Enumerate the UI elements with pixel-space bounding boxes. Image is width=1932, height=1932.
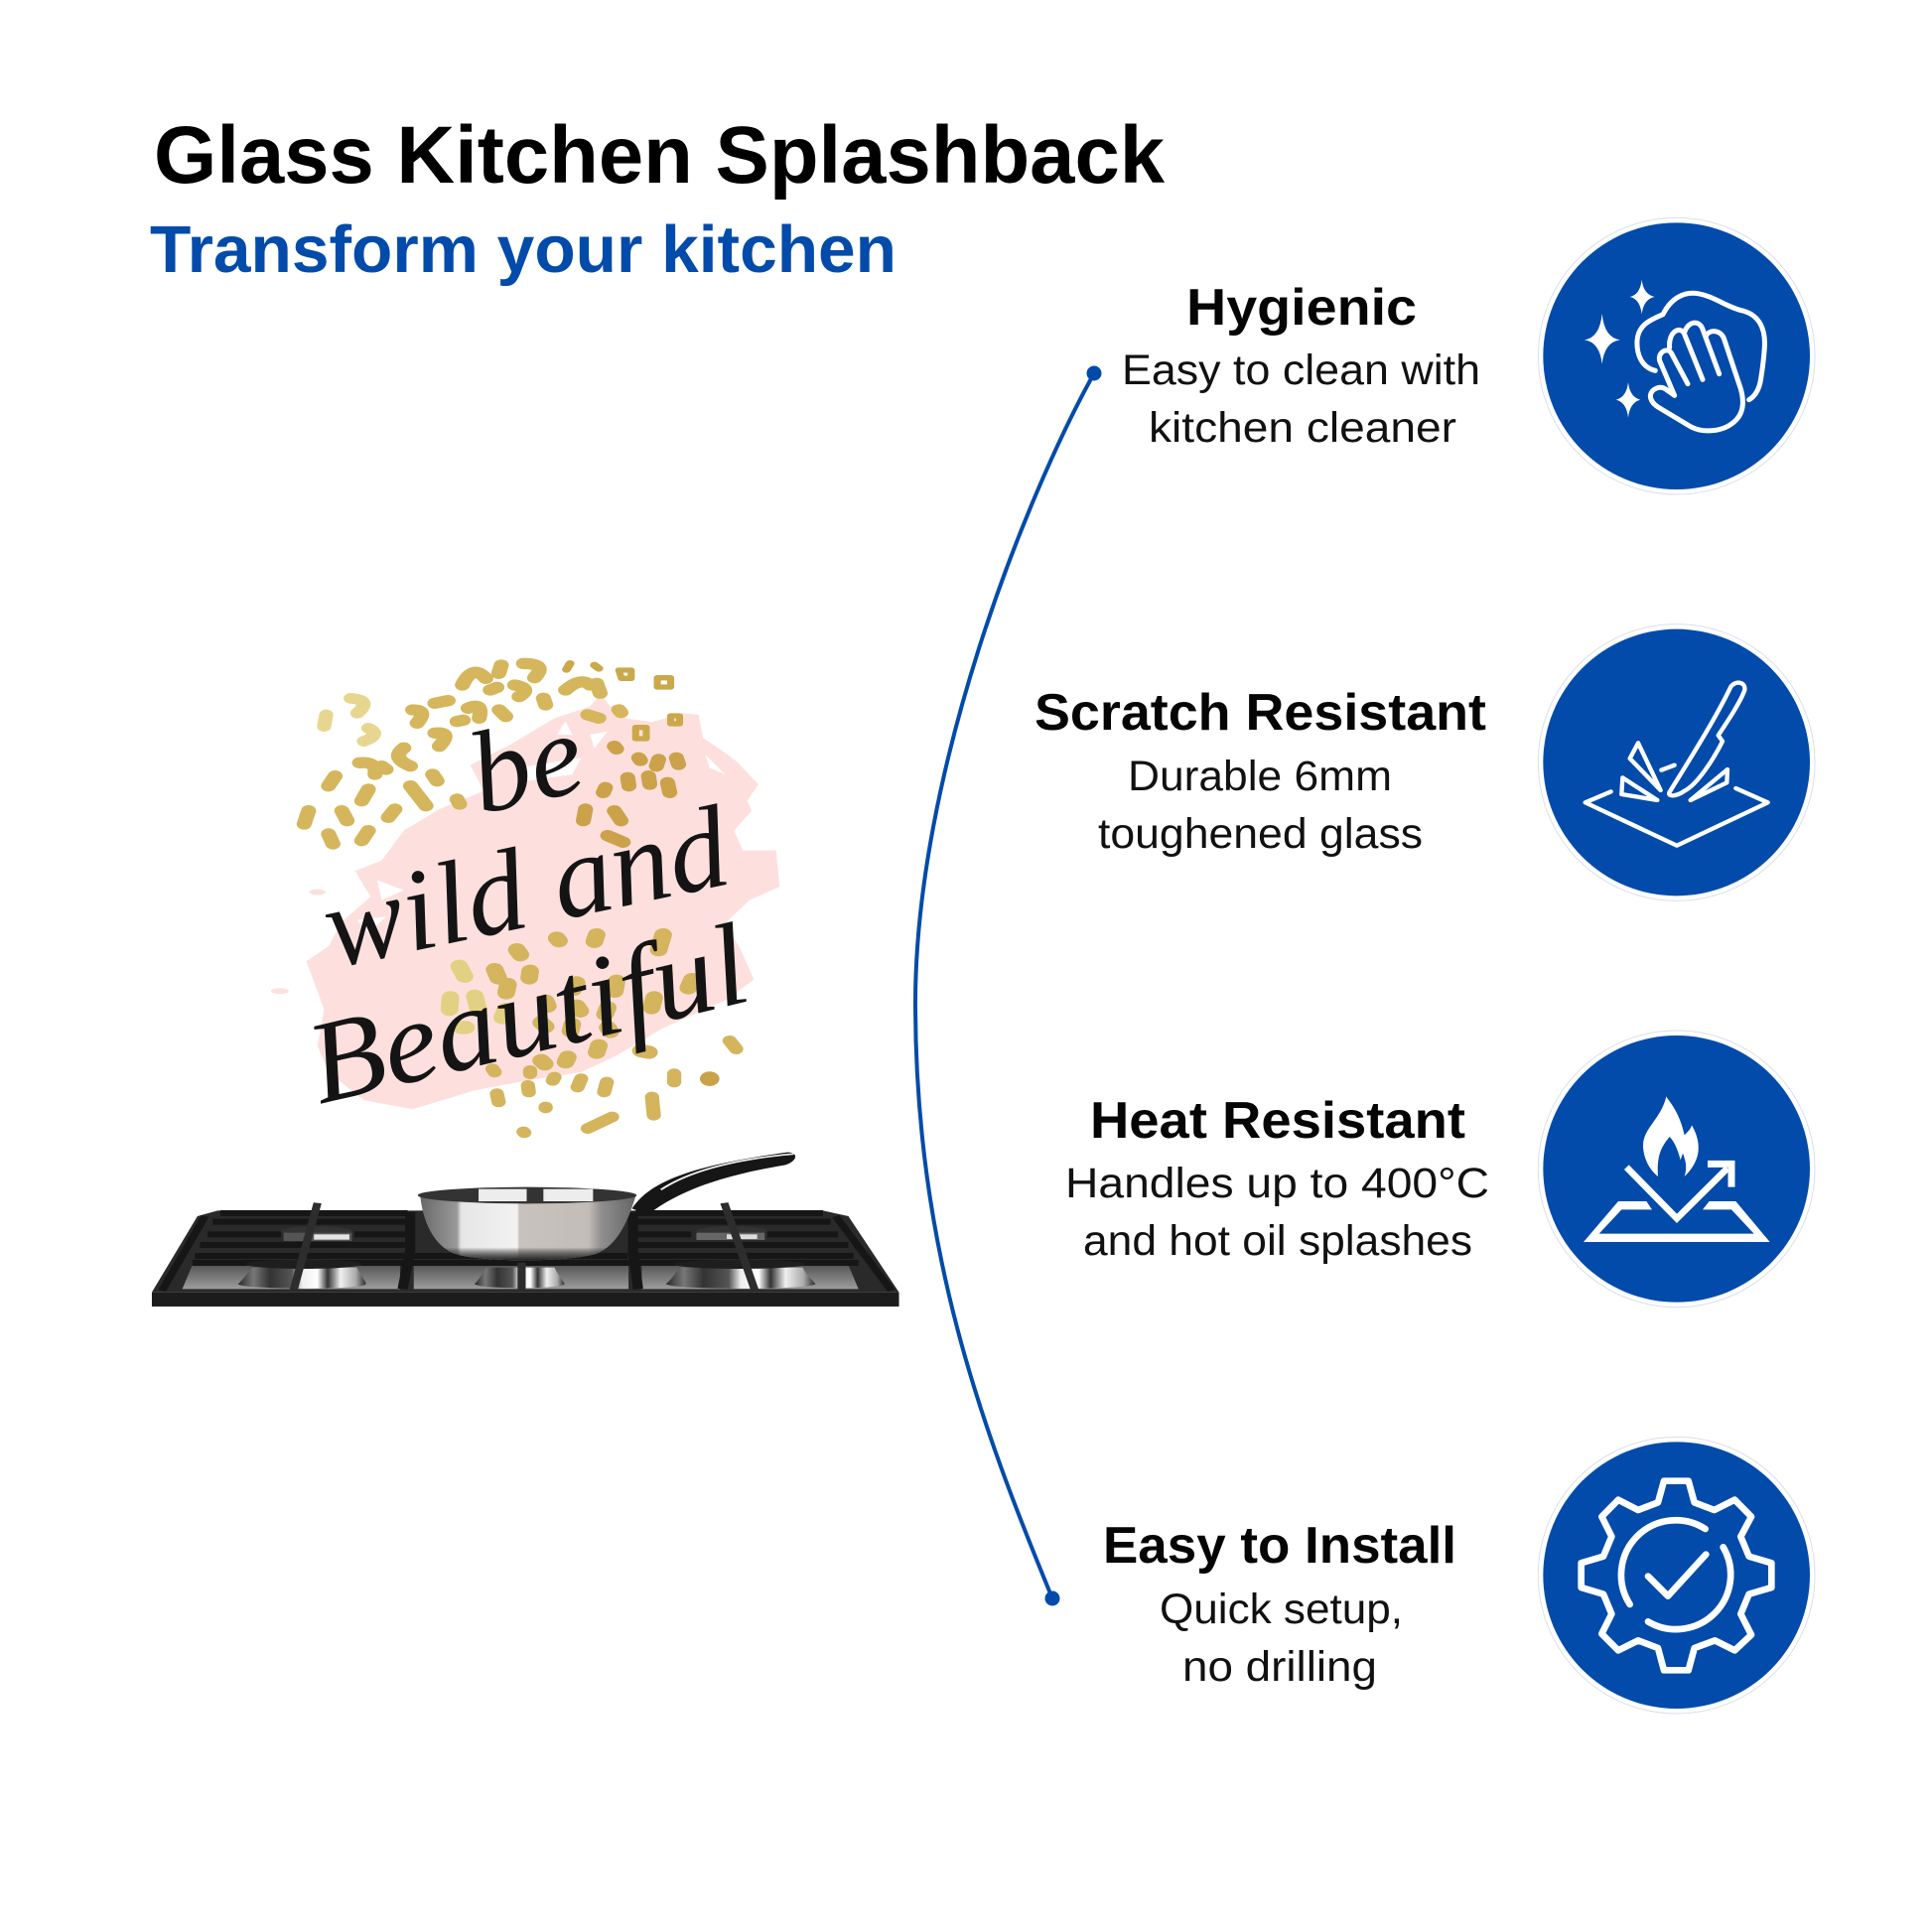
icon: knife on glass: [1538, 624, 1815, 900]
feature: easy to install text: no drilling: [1182, 1643, 1377, 1691]
feature: hygienic text: Hygienic: [1186, 279, 1417, 337]
panel: splashback artwork: [271, 663, 779, 1133]
rear burners: [281, 1226, 767, 1241]
pan body: [420, 1196, 635, 1260]
script lettering: [295, 687, 760, 1129]
icon: hand wiping: [1538, 217, 1815, 494]
gold leopard spots: [304, 663, 737, 1133]
feature: easy to install text: Easy to Install: [1103, 1517, 1456, 1575]
feature: scratch resistant text: [1035, 684, 1486, 858]
title: Glass Kitchen Splashback: [154, 110, 1165, 201]
frying pan: [418, 1153, 795, 1260]
script lettering: Beautiful: [295, 898, 760, 1129]
feature: heat resistant text: and hot oil splashes: [1083, 1217, 1472, 1265]
script lettering: be: [457, 687, 595, 839]
burner wells: [183, 1265, 859, 1289]
feature: heat resistant text: Handles up to 400°C: [1065, 1160, 1489, 1207]
feature: heat resistant text: [1065, 1092, 1489, 1265]
front rim: [152, 1293, 899, 1307]
pink brush stroke: [271, 693, 779, 1109]
feature: hygienic text: [1122, 279, 1480, 452]
feature: hygienic text: Easy to clean with: [1122, 346, 1480, 394]
grate crossbars: [294, 1203, 755, 1290]
feature: scratch resistant text: Durable 6mm: [1128, 753, 1392, 800]
feature: hygienic text: kitchen cleaner: [1149, 404, 1456, 452]
connector arc: [915, 365, 1102, 1606]
hob top plate: [152, 1210, 899, 1293]
feature: heat resistant text: Heat Resistant: [1090, 1092, 1465, 1150]
icon: gear with check: [1538, 1437, 1815, 1714]
panel: gas hob with pan: [152, 1153, 899, 1307]
icon: flame on glass: [1538, 1031, 1815, 1308]
script lettering: wild and: [312, 780, 740, 993]
subtitle: Transform your kitchen: [150, 212, 897, 287]
grate bars: [162, 1212, 892, 1291]
front burners: [238, 1260, 815, 1289]
feature: scratch resistant text: toughened glass: [1098, 810, 1423, 858]
feature: scratch resistant text: Scratch Resistant: [1035, 684, 1486, 742]
feature: easy to install text: Quick setup,: [1160, 1586, 1403, 1633]
pan handle: [632, 1153, 795, 1214]
feature: easy to install text: [1103, 1517, 1456, 1691]
pan rim: [418, 1187, 636, 1203]
